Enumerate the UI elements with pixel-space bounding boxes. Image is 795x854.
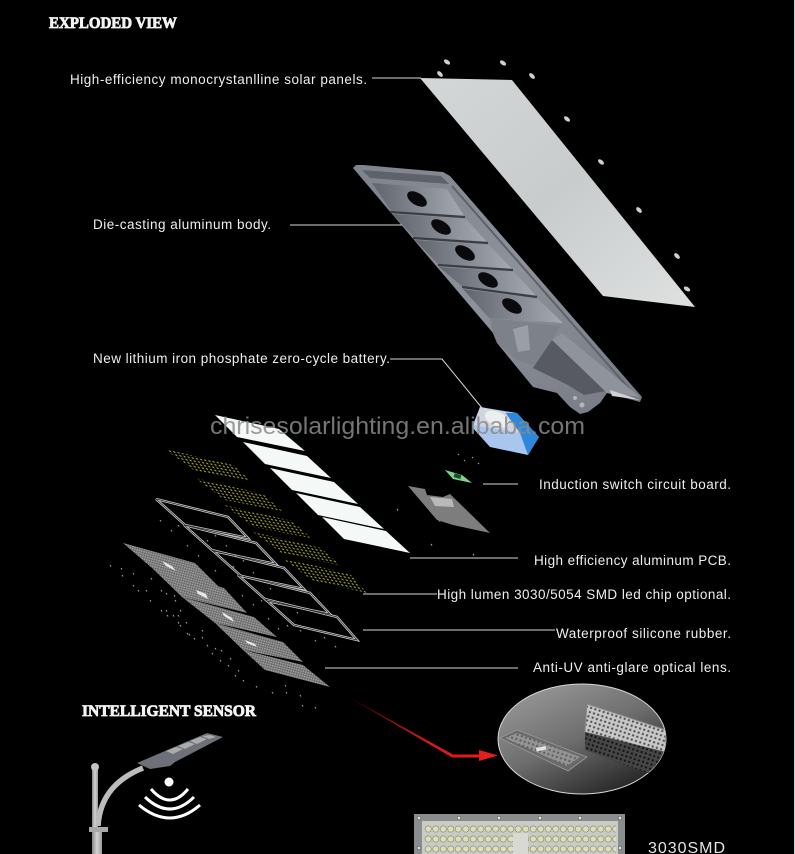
aluminum body xyxy=(353,165,642,414)
upright lens part xyxy=(585,704,666,752)
detail circle xyxy=(498,684,666,794)
aluminum base plate xyxy=(408,486,490,533)
label: led chip: High lumen 3030/5054 SMD led chip optional. xyxy=(437,587,731,602)
lamp head xyxy=(137,733,223,769)
label: battery xyxy=(93,351,482,408)
red arrow xyxy=(345,695,498,761)
arm xyxy=(98,768,143,826)
label: silicone rubber: Waterproof silicone rubber. xyxy=(556,626,731,641)
lamp panels xyxy=(166,735,216,754)
label: induction switch: Induction switch circuit board. xyxy=(539,477,731,492)
battery xyxy=(472,407,539,455)
optical lenses xyxy=(123,543,330,687)
label: optical lens: Anti-UV anti-glare optical lens. xyxy=(533,660,731,675)
white aluminum PCB plates xyxy=(215,415,410,553)
silicone rubber rings xyxy=(156,499,357,640)
heading: intelligent sensor: INTELLIGENT SENSOR xyxy=(82,703,256,720)
circuit board xyxy=(445,470,472,483)
body top rail xyxy=(362,170,449,184)
label: solar panels: High-efficiency monocrystanlline solar panels. xyxy=(70,72,367,87)
sensor waves xyxy=(139,789,200,818)
scattered screws xyxy=(110,565,316,708)
body housing xyxy=(490,318,560,366)
module center block xyxy=(513,833,528,854)
module screws xyxy=(417,816,622,850)
lens highlights xyxy=(162,561,257,647)
sensor dot xyxy=(164,778,174,786)
label: aluminum PCB: High efficiency aluminum PCB. xyxy=(534,553,731,568)
watermark: chrisesolarlighting.en.alibaba.com xyxy=(210,413,585,440)
body holes xyxy=(404,188,525,317)
LED module photo xyxy=(414,814,625,854)
pole xyxy=(92,768,98,828)
heading: exploded view: EXPLODED VIEW xyxy=(49,15,177,32)
panel screws xyxy=(436,58,691,292)
body ribs xyxy=(390,212,537,297)
label: battery: New lithium iron phosphate zero-cycle battery. xyxy=(93,351,390,366)
flat lens part xyxy=(500,730,587,771)
body side rail xyxy=(452,186,632,392)
street lamp with sensor xyxy=(89,733,223,854)
label: aluminum body: Die-casting aluminum body. xyxy=(93,217,271,232)
LED chip arrays xyxy=(165,449,367,593)
body bays xyxy=(372,183,563,323)
solar panel xyxy=(420,58,695,307)
